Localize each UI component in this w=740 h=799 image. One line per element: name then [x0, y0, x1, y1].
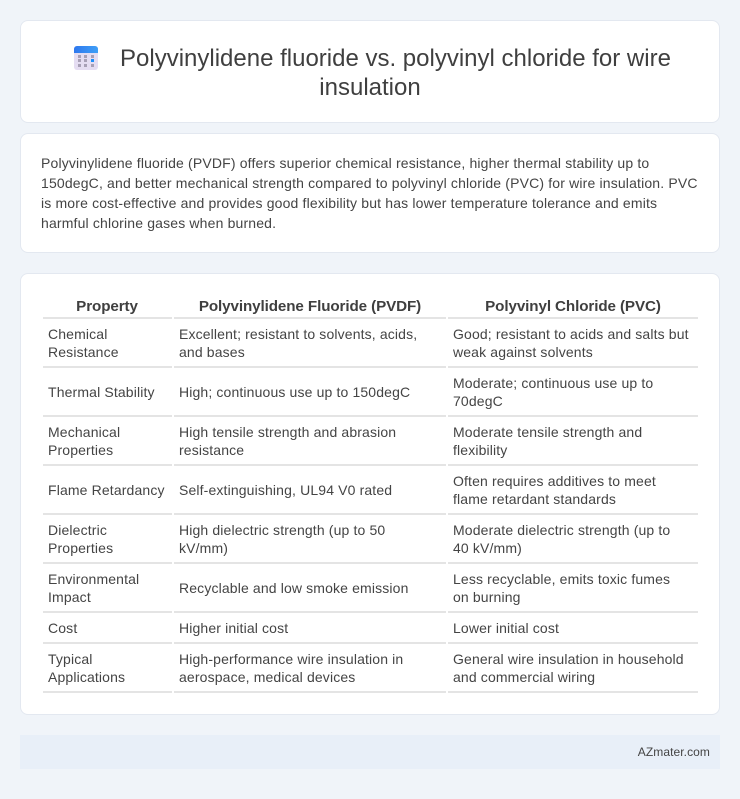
PVDF mechanical properties: High tensile strength and abrasion	[179, 424, 396, 440]
row: Flame Retardancy: Flame Retardancy	[48, 482, 165, 498]
PVC flame retardancy	[453, 473, 656, 507]
summary text: 150degC, and better mechanical strength compared to polyvinyl chloride (PVC) for wire insulation. PVC	[41, 175, 698, 191]
PVC dielectric properties: Moderate dielectric strength (up to	[453, 522, 670, 538]
PVDF thermal stability: High; continuous use up to 150degC	[179, 384, 410, 400]
PVC typical applications: General wire insulation in household	[453, 651, 684, 667]
PVC dielectric properties: 40 kV/mm)	[453, 540, 522, 556]
row: Environmental Impact	[48, 571, 139, 605]
PVC environmental impact: on burning	[453, 589, 521, 605]
PVDF cost: Higher initial cost	[179, 620, 288, 636]
PVDF mechanical properties	[179, 424, 396, 458]
PVC chemical resistance: Good; resistant to acids and salts but	[453, 326, 689, 342]
PVC typical applications	[453, 651, 684, 685]
row: Typical Applications: Applications	[48, 669, 125, 685]
row: Typical Applications	[48, 651, 125, 685]
header card	[20, 20, 720, 123]
PVC thermal stability	[453, 375, 653, 409]
summary text: is more cost-effective and provides good flexibility but has lower temperature tolerance and emits	[41, 195, 657, 211]
PVC mechanical properties: Moderate tensile strength and	[453, 424, 642, 440]
row: Mechanical Properties	[48, 424, 120, 458]
PVC environmental impact	[453, 571, 670, 605]
title: insulation	[319, 74, 421, 101]
icon: calendar grid	[74, 46, 98, 70]
footer bar	[20, 735, 720, 769]
PVC flame retardancy: Often requires additives to meet	[453, 473, 656, 489]
table card	[20, 273, 720, 715]
column header: PVC: Polyvinyl Chloride (PVC)	[485, 298, 661, 315]
PVDF dielectric properties: High dielectric strength (up to 50	[179, 522, 385, 538]
PVDF dielectric properties	[179, 522, 385, 556]
row: Typical Applications: Typical	[48, 651, 93, 667]
summary text: harmful chlorine gases when burned.	[41, 215, 276, 231]
title	[120, 45, 671, 101]
summary text: Polyvinylidene fluoride (PVDF) offers superior chemical resistance, higher thermal stability up to	[41, 155, 649, 171]
PVDF typical applications: aerospace, medical devices	[179, 669, 355, 685]
PVC typical applications: and commercial wiring	[453, 669, 595, 685]
PVDF typical applications	[179, 651, 403, 685]
row: Chemical Resistance: Resistance	[48, 344, 119, 360]
row: Thermal Stability: Thermal Stability	[48, 384, 155, 400]
PVC dielectric properties	[453, 522, 670, 556]
column header: Property: Property	[76, 298, 138, 315]
PVDF mechanical properties: resistance	[179, 442, 244, 458]
row: Dielectric Properties: Dielectric	[48, 522, 107, 538]
row: Mechanical Properties: Properties	[48, 442, 113, 458]
column header: PVDF: Polyvinylidene Fluoride (PVDF)	[199, 298, 421, 315]
PVC flame retardancy: flame retardant standards	[453, 491, 616, 507]
PVC thermal stability: 70degC	[453, 393, 503, 409]
row: Mechanical Properties: Mechanical	[48, 424, 120, 440]
row: Environmental Impact: Impact	[48, 589, 91, 605]
summary text	[41, 155, 698, 231]
PVDF chemical resistance: Excellent; resistant to solvents, acids,	[179, 326, 417, 342]
PVDF environmental impact: Recyclable and low smoke emission	[179, 580, 408, 596]
PVDF chemical resistance: and bases	[179, 344, 245, 360]
PVC environmental impact: Less recyclable, emits toxic fumes	[453, 571, 670, 587]
PVC mechanical properties: flexibility	[453, 442, 507, 458]
row: Dielectric Properties: Properties	[48, 540, 113, 556]
row: Cost: Cost	[48, 620, 77, 636]
PVC mechanical properties	[453, 424, 642, 458]
PVDF flame retardancy: Self-extinguishing, UL94 V0 rated	[179, 482, 392, 498]
PVC chemical resistance: weak against solvents	[453, 344, 593, 360]
row: Chemical Resistance	[48, 326, 119, 360]
PVC chemical resistance	[453, 326, 689, 360]
row: Environmental Impact: Environmental	[48, 571, 139, 587]
PVC cost: Lower initial cost	[453, 620, 559, 636]
PVDF dielectric properties: kV/mm)	[179, 540, 228, 556]
title: Polyvinylidene fluoride vs. polyvinyl chloride for wire	[120, 45, 671, 72]
footer credit: AZmater.com	[638, 745, 710, 759]
row: Chemical Resistance: Chemical	[48, 326, 107, 342]
row: Dielectric Properties	[48, 522, 113, 556]
PVDF typical applications: High-performance wire insulation in	[179, 651, 403, 667]
PVC thermal stability: Moderate; continuous use up to	[453, 375, 653, 391]
summary card	[20, 133, 720, 253]
PVDF chemical resistance	[179, 326, 417, 360]
